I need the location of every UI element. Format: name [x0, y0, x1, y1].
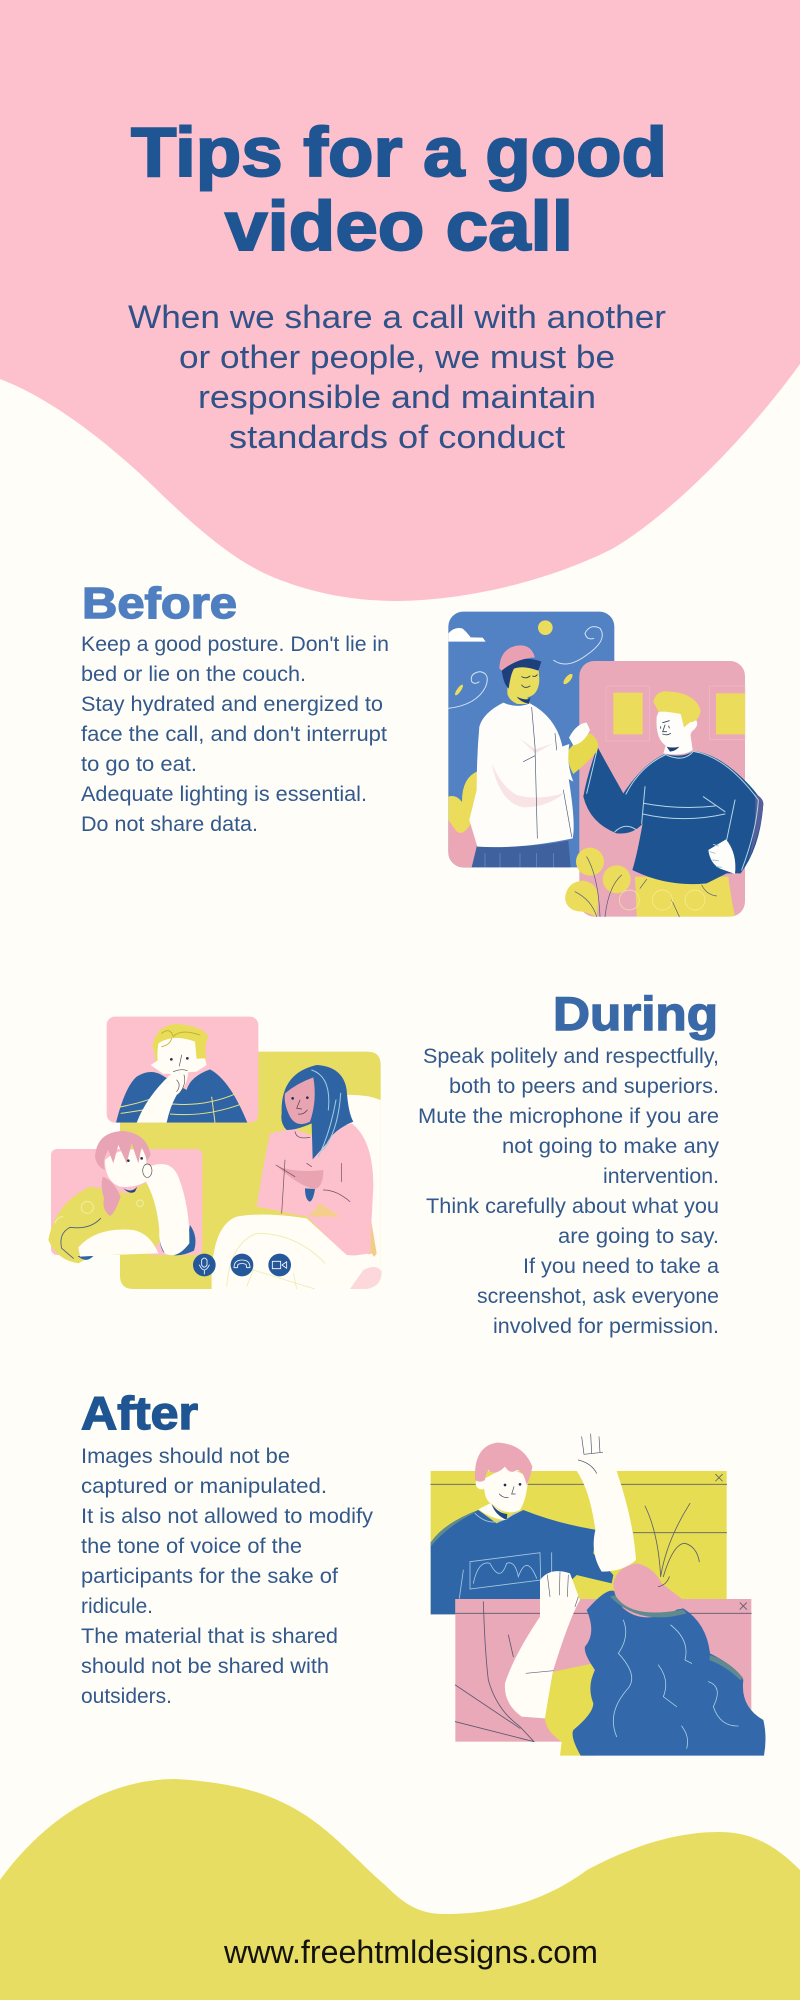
text: during tips: not going to make any [502, 1135, 720, 1158]
person: top window [107, 1017, 258, 1123]
text: during tips: both to peers and superiors. [449, 1075, 719, 1098]
person: woman on couch [212, 1065, 384, 1289]
text: before tips: bed or lie on the couch. [81, 663, 306, 686]
illustration: three people on a video call [48, 1017, 384, 1289]
footer website: www.freehtmldesigns.com [223, 1934, 598, 1970]
text: after tips: should not be shared with [81, 1655, 329, 1678]
text: during tips: are going to say. [558, 1225, 719, 1248]
pink card with blond man [562, 661, 763, 917]
text: after tips: The material that is shared [81, 1625, 338, 1648]
text: before tips: Stay hydrated and energized to [81, 693, 383, 716]
text: after tips: captured or manipulated. [81, 1475, 327, 1498]
pink header blob [0, 0, 800, 601]
text: after tips: the tone of voice of the [81, 1535, 302, 1558]
person: bottom-left window [48, 1131, 202, 1263]
title: Tips for a good [131, 113, 667, 191]
intro text: or other people, we must be [179, 339, 615, 375]
yellow footer blob [0, 1779, 800, 2000]
yellow window with man [431, 1434, 727, 1614]
heading: during: During [553, 987, 718, 1040]
intro text: standards of conduct [229, 419, 565, 455]
panel: before [81, 579, 389, 836]
text: before tips: Keep a good posture. Don't lie in [81, 633, 389, 656]
illustration: two people shaking hands [448, 612, 763, 917]
text: before tips: to go to eat. [81, 753, 197, 776]
text: before tips: face the call, and don't interrupt [81, 723, 387, 746]
text: during tips: Think carefully about what you [426, 1195, 719, 1218]
call control icons [193, 1254, 291, 1276]
title [131, 113, 667, 265]
text: after tips [81, 1445, 374, 1708]
text: before tips [81, 633, 389, 836]
heading: before: Before [82, 579, 237, 628]
text: during tips: Mute the microphone if you are [418, 1105, 719, 1128]
text: during tips: involved for permission. [493, 1315, 719, 1338]
text: during tips [418, 1045, 720, 1338]
text: before tips: Do not share data. [81, 813, 258, 836]
text: during tips: screenshot, ask everyone [477, 1285, 719, 1308]
text: after tips: outsiders. [81, 1685, 172, 1708]
panel: during [418, 987, 720, 1338]
text: before tips: Adequate lighting is essential. [81, 783, 367, 806]
intro text: When we share a call with another [128, 299, 666, 335]
blue card with greeting man [448, 612, 614, 867]
text: after tips: It is also not allowed to modify [81, 1505, 374, 1528]
intro text: responsible and maintain [198, 379, 596, 415]
text: after tips: Images should not be [81, 1445, 290, 1468]
text: during tips: If you need to take a [523, 1255, 719, 1278]
title: video call [225, 187, 573, 265]
illustration: man and woman waving [431, 1434, 766, 1756]
text: during tips: intervention. [603, 1165, 719, 1188]
intro text [128, 299, 666, 455]
text: after tips: participants for the sake of [81, 1565, 338, 1588]
panel: after [81, 1387, 374, 1708]
text: during tips: Speak politely and respectfully, [423, 1045, 719, 1068]
heading: after: After [81, 1387, 198, 1439]
pink window with woman [455, 1563, 766, 1756]
yellow backing card [120, 1052, 381, 1289]
text: after tips: ridicule. [81, 1595, 153, 1618]
